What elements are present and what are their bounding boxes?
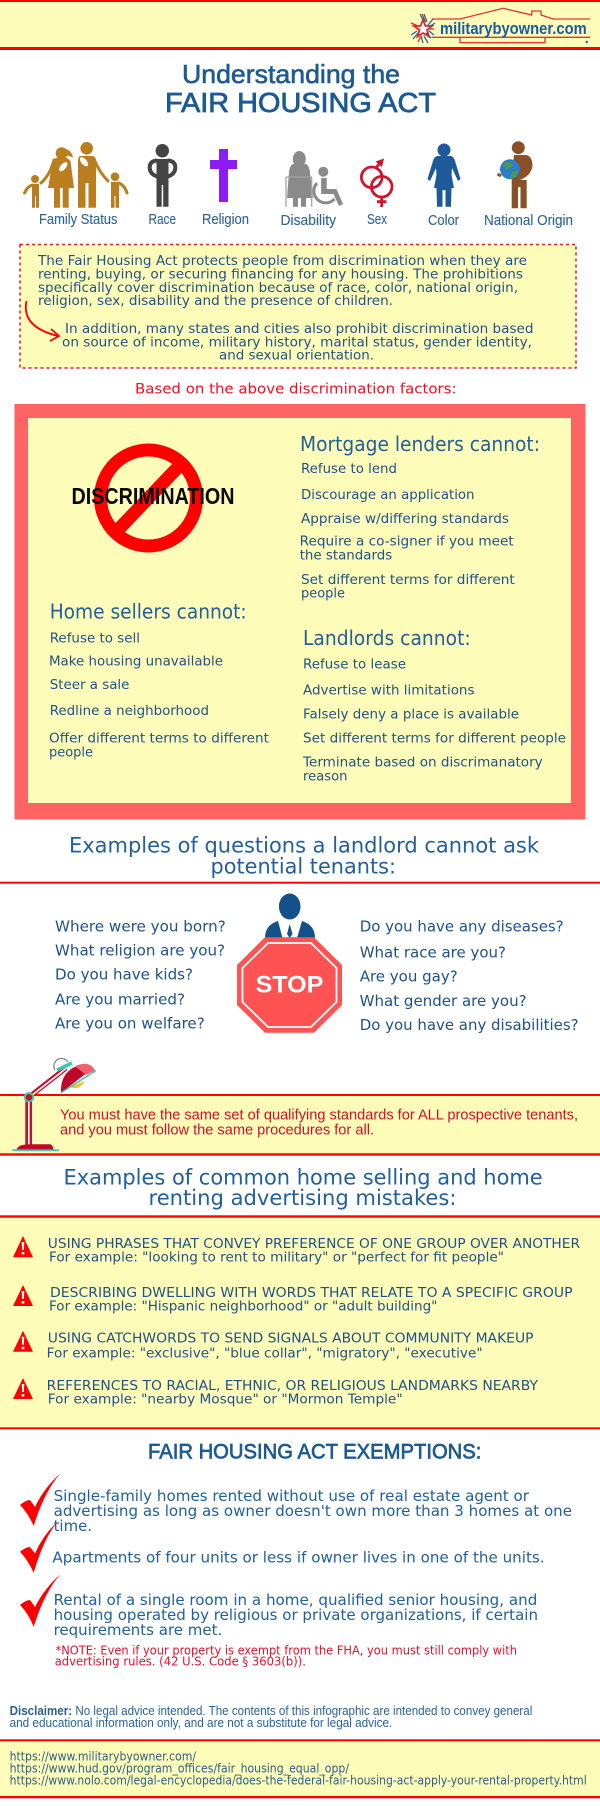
exemption 3: requirements are met. (54, 1621, 222, 1639)
intro text panel: renting, buying, or securing financing for any housing. The prohibitions (38, 266, 523, 282)
list: questions right: Do you have any diseases? (360, 918, 564, 936)
icon labels: Sex (367, 212, 388, 228)
list: home sellers: Refuse to sell (50, 631, 140, 647)
list: mortgage lenders: Refuse to lend (301, 461, 397, 477)
icon: family status (24, 142, 127, 208)
list: mortgage lenders: the standards (300, 547, 392, 563)
icon labels (39, 212, 573, 229)
list: questions right: What gender are you? (360, 992, 527, 1010)
list: mortgage lenders: Discourage an application (301, 487, 474, 503)
source links: https://www.hud.gov/program_offices/fair_housing_equal_opp/ (10, 1762, 350, 1776)
list: mortgage lenders: people (301, 586, 345, 602)
list: mortgage lenders (300, 432, 540, 602)
list: home sellers: Make housing unavailable (49, 654, 223, 670)
icon: national origin (498, 141, 532, 208)
list: home sellers: Home sellers cannot: (50, 599, 247, 623)
list: questions right: Are you gay? (360, 967, 458, 985)
logo: militarybyowner.com (411, 8, 590, 43)
mistake 4: REFERENCES TO RACIAL, ETHNIC, OR RELIGIOUS LANDMARKS NEARBY (47, 1378, 539, 1394)
mistake 1: USING PHRASES THAT CONVEY PREFERENCE OF ONE GROUP OVER ANOTHER (48, 1236, 580, 1252)
heading: exemptions: FAIR HOUSING ACT EXEMPTIONS: (148, 1440, 481, 1463)
list: questions left: Are you married? (55, 990, 185, 1008)
list: questions left: Are you on welfare? (55, 1014, 205, 1032)
list: landlords: reason (303, 768, 348, 784)
icon: religion cross (210, 149, 237, 202)
note (55, 1642, 517, 1669)
list: landlords: Falsely deny a place is available (303, 706, 519, 722)
mistake 2: DESCRIBING DWELLING WITH WORDS THAT RELATE TO A SPECIFIC GROUP (50, 1285, 572, 1301)
list: landlords (302, 626, 566, 784)
heading: advertising mistakes (64, 1165, 543, 1211)
heading: advertising mistakes: renting advertising mistakes: (148, 1186, 456, 1211)
icon: no discrimination sign: DISCRIMINATION (72, 483, 234, 509)
panel: advertising mistakes (0, 1215, 600, 1429)
source links (0, 1739, 600, 1798)
exemption 1: Single-family homes rented without use of real estate agent or (54, 1487, 530, 1505)
protected classes icon row (24, 141, 573, 229)
list: landlords: Landlords cannot: (303, 626, 471, 650)
list: questions right (360, 918, 579, 1034)
mistake 3 (13, 1331, 534, 1362)
list: home sellers: Offer different terms to different (49, 731, 269, 747)
icon: person behind stop sign (237, 894, 342, 1033)
icon: desk lamp (12, 1058, 96, 1151)
icon: no discrimination sign (72, 450, 234, 546)
exemption 3 (20, 1574, 538, 1639)
list: mortgage lenders: Require a co-signer if you meet (300, 534, 514, 550)
stop sign: STOP (256, 972, 323, 999)
callout: qualifying standards (0, 1094, 600, 1156)
mistake 4 (13, 1378, 539, 1407)
list: home sellers (49, 599, 269, 760)
heading: advertising mistakes: Examples of common home selling and home (64, 1165, 543, 1190)
exemption 2 (20, 1522, 545, 1573)
list: mortgage lenders: Mortgage lenders cannot: (300, 432, 540, 456)
icon labels: Color (428, 213, 459, 229)
disclaimer: Disclaimer: No legal advice intended. The contents of this infographic are intended to convey general (10, 1704, 532, 1718)
heading: landlord questions: potential tenants: (210, 854, 396, 879)
intro text panel: The Fair Housing Act protects people from discrimination when they are (37, 253, 527, 269)
icon: disability (286, 151, 343, 207)
title (165, 59, 436, 118)
intro text panel: In addition, many states and cities also prohibit discrimination based (65, 321, 534, 337)
list: landlords: Advertise with limitations (303, 682, 474, 698)
disclaimer: and educational information only, and are not a substitute for legal advice. (10, 1716, 392, 1730)
list: landlords: Refuse to lease (303, 657, 406, 673)
list: questions right: What race are you? (360, 943, 506, 961)
mistake 4: For example: "nearby Mosque" or "Mormon Temple" (48, 1391, 403, 1407)
list: questions left: Do you have kids? (55, 966, 193, 984)
icon: sex symbols (361, 158, 392, 207)
mistake 1: For example: "looking to rent to military" or "perfect for fit people" (49, 1250, 504, 1266)
disclaimer (10, 1704, 532, 1730)
mistake 3: USING CATCHWORDS TO SEND SIGNALS ABOUT COMMUNITY MAKEUP (48, 1331, 534, 1347)
mistake 1 (13, 1236, 580, 1266)
icon labels: Race (148, 212, 176, 228)
list: home sellers: Redline a neighborhood (50, 703, 209, 719)
icon labels: Disability (280, 213, 337, 229)
callout: qualifying standards: and you must follow the same procedures for all. (60, 1122, 374, 1138)
list: landlords: Set different terms for different people (303, 731, 566, 747)
panel: who cannot discriminate (14, 404, 586, 820)
list: mortgage lenders: Appraise w/differing standards (301, 511, 509, 527)
title: FAIR HOUSING ACT (165, 87, 436, 118)
list: questions left: What religion are you? (55, 942, 225, 960)
source links: https://www.militarybyowner.com/ (10, 1750, 197, 1764)
arrow (26, 301, 59, 341)
heading: landlord questions (0, 834, 600, 884)
exemption 1 (20, 1473, 572, 1535)
list: home sellers: people (49, 744, 93, 760)
note: *NOTE: Even if your property is exempt from the FHA, you must still comply with (56, 1642, 517, 1657)
exemption 3: housing operated by religious or private organizations, if certain (54, 1606, 538, 1624)
list: questions left: Where were you born? (55, 918, 226, 936)
exemption 2: Apartments of four units or less if owner lives in one of the units. (52, 1548, 545, 1566)
list: landlords: Terminate based on discrimanatory (302, 755, 543, 771)
header band with logo (0, 0, 600, 50)
subheading: discrimination factors: Based on the above discrimination factors: (135, 381, 456, 397)
intro text panel: and sexual orientation. (219, 348, 374, 364)
list: questions right: Do you have any disabilities? (360, 1016, 579, 1034)
mistake 2 (13, 1285, 572, 1314)
logo: militarybyowner.com: militarybyowner.com (440, 20, 587, 38)
exemption 1: time. (54, 1517, 92, 1535)
title: Understanding the (182, 59, 400, 89)
icon: color (428, 144, 460, 207)
list: mortgage lenders: Set different terms for different (301, 572, 515, 588)
list: questions left (55, 918, 226, 1032)
intro text panel: religion, sex, disability and the presence of children. (38, 293, 393, 309)
exemption 1: advertising as long as owner doesn't own more than 3 homes at one (54, 1502, 572, 1520)
mistake 2: For example: "Hispanic neighborhood" or "adult building" (49, 1298, 437, 1314)
icon labels: Religion (202, 212, 249, 228)
intro text panel: on source of income, military history, marital status, gender identity, (62, 334, 532, 350)
exemption 3: Rental of a single room in a home, qualified senior housing, and (54, 1591, 537, 1609)
icon labels: National Origin (484, 213, 573, 229)
mistake 3: For example: "exclusive", "blue collar", "migratory", "executive" (47, 1346, 483, 1362)
icon labels: Family Status (39, 212, 118, 228)
callout: qualifying standards: You must have the same set of qualifying standards for ALL prospective tenants, (60, 1107, 578, 1123)
heading: landlord questions: Examples of questions a landlord cannot ask (69, 834, 540, 859)
list: home sellers: Steer a sale (50, 677, 129, 693)
intro text panel (20, 244, 576, 368)
note: advertising rules. (42 U.S. Code § 3603(b)). (55, 1654, 306, 1669)
intro text panel: specifically cover discrimination because of race, color, national origin, (38, 280, 518, 296)
icon: race (150, 144, 175, 207)
